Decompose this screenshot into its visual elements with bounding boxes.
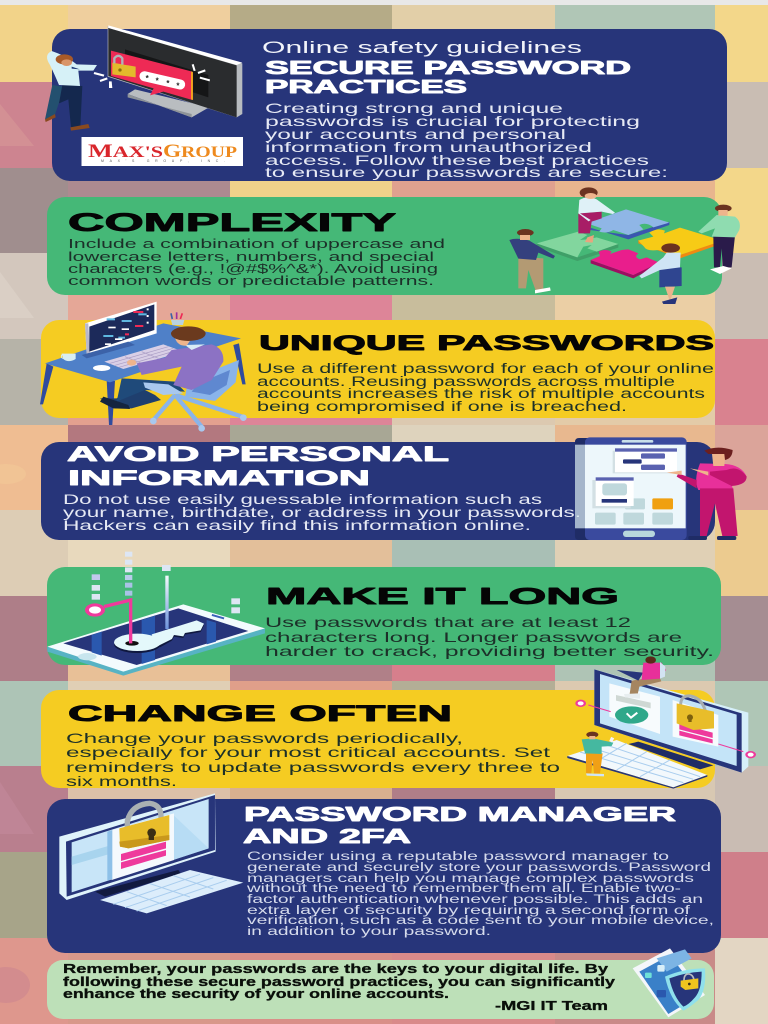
heading: unique passwords: UNIQUE PASSWORDS [259,332,714,355]
password manager text: managers can help you manage complex passwords [247,873,694,885]
password manager text: without the need to remember them all. Enable two- [245,883,681,895]
password manager text [245,851,714,938]
panel: make it long [47,552,721,676]
icon: worried man at locked monitor: * [146,74,150,83]
avoid personal information text: Hackers can easily find this information online. [63,517,531,533]
panel: avoid personal information [41,437,747,540]
avoid personal information text: Do not use easily guessable information such as [63,491,542,507]
icon: phone with security shield [633,948,705,1017]
change often text: Change your passwords periodically, [66,730,463,746]
unique passwords text [257,361,714,414]
avoid personal information text: your name, birthdate, or address in your passwords. [63,504,581,520]
heading: change often: CHANGE OFTEN [68,701,452,726]
heading: avoid personal information: INFORMATION [68,467,370,490]
icon: worried man at locked monitor [45,25,242,131]
avoid personal information text [63,491,581,533]
make it long text [265,614,714,659]
password manager text: Consider using a reputable password manager to [247,851,669,863]
logo: Max's Group: MAX'S GROUP, INC. [101,159,225,163]
subtitle: Online safety guidelines [262,38,582,57]
unique passwords text: accounts increases the risk of multiple accounts [257,386,705,401]
icon: worried man at locked monitor: * [166,79,170,88]
intro text: Creating strong and unique [265,100,563,116]
password manager text: factor authentication whenever possible. This adds an [247,894,703,906]
intro text: your accounts and personal [265,126,566,142]
make it long text: harder to crack, providing better security. [265,643,714,659]
intro text: information from unauthorized [265,139,592,155]
icon: phone with chat windows and pointing person [575,437,747,540]
password manager text: in addition to your password. [247,926,491,938]
complexity text: lowercase letters, numbers, and special [68,249,434,264]
unique passwords text: Use a different password for each of your online [257,361,714,376]
icon: monitor with lock, check card and users [567,656,756,789]
heading: secure password practices [265,57,631,97]
complexity text: characters (e.g., !@#$%^&*). Avoid using [68,261,438,276]
complexity text [68,236,445,288]
panel: intro header [45,25,727,181]
heading: make it long: MAKE IT LONG [266,583,619,609]
intro text [265,100,668,180]
icon: person at desk with monitor [40,302,247,432]
panel: unique passwords [40,302,715,432]
panel: change often [41,656,756,789]
closing message [63,962,615,1001]
unique passwords text: being compromised if one is breached. [257,399,627,414]
closing message: following these secure password practices, you can significantly [63,975,615,989]
change often text: especially for your most critical accounts. Set [66,744,550,760]
complexity text: common words or predictable patterns. [68,273,434,288]
intro text: passwords is crucial for protecting [265,113,640,129]
panel: closing note [47,948,714,1019]
heading: password manager and 2FA: PASSWORD MANAGER [244,804,677,826]
change often text: six months. [66,773,177,789]
intro text: access. Follow these best practices [265,152,649,168]
icon: team assembling puzzle [509,187,740,304]
heading: secure password practices: PRACTICES [265,76,467,97]
closing message: Remember, your passwords are the keys to your digital life. By [63,962,608,976]
icon: worried man at locked monitor: * [176,82,180,91]
unique passwords text: accounts. Reusing passwords across multiple [257,374,675,389]
complexity text: Include a combination of uppercase and [68,236,445,251]
password manager text: verification, such as a code sent to your mobile device, [247,915,714,927]
heading: avoid personal information [67,443,449,490]
logo: Max's Group: M AX'S [88,141,163,162]
password manager text: generate and securely store your passwords. Password [247,862,711,874]
change often text: reminders to update passwords every three to [66,759,560,775]
change often text [66,730,560,789]
closing message: enhance the security of your online accounts. [63,987,449,1001]
make it long text: characters long. Longer passwords are [265,629,682,645]
heading: complexity: COMPLEXITY [68,209,397,237]
logo: Max's Group: GROUP [163,141,237,162]
heading: avoid personal information: AVOID PERSONAL [67,443,449,466]
logo: Max's Group [82,137,243,166]
icon: worried man at locked monitor: * [156,76,160,85]
icon: monitor with padlock and keyboard [59,793,243,913]
heading: password manager and 2FA [243,804,677,848]
icon: key on phone screen [47,552,265,676]
panel: password manager and 2FA [47,793,721,953]
signature: -MGI IT Team [495,999,608,1013]
heading: password manager and 2FA: AND 2FA [243,826,411,848]
password manager text: extra layer of security by requiring a second form of [247,905,691,917]
make it long text: Use passwords that are at least 12 [265,614,631,630]
heading: secure password practices: SECURE PASSWORD [265,57,631,78]
intro text: to ensure your passwords are secure: [265,164,668,180]
panel: complexity [47,187,740,304]
